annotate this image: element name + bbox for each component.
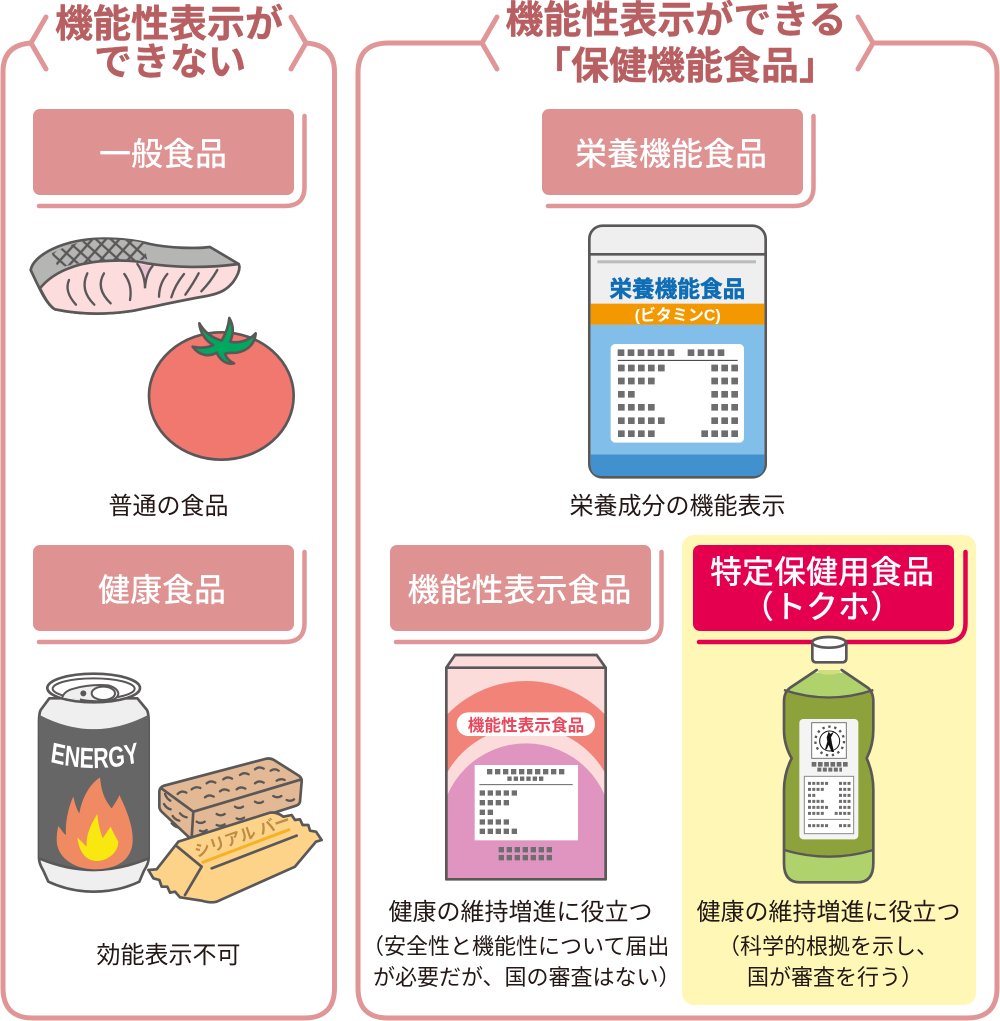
icon: cereal bar wrapper: シリアル バー [192,812,293,861]
icon: function claim food box: 機能性表示食品 [468,715,584,735]
label: tokuho: （トクホ） [742,589,902,625]
icon: vitamin supplement pouch [589,226,766,477]
caption: ordinary food: 普通の食品 [108,493,228,520]
heading: cannot display function: できない [94,42,246,84]
caption: no efficacy claims: 効能表示不可 [96,942,240,969]
text: notification note: が必要だが、国の審査はない） [373,965,681,990]
label: foods with function claims [390,545,662,642]
icon: energy drink can [38,672,150,893]
icon: function claim food box [445,654,607,881]
panel: can display function [358,17,997,1018]
icon: tokuho bottle [780,637,880,887]
icon: cereal block [159,759,302,839]
label: general food [33,109,304,206]
caption: nutrient function: 栄養成分の機能表示 [570,493,786,520]
heading: can display function: 機能性表示ができる [505,0,847,42]
icon: vitamin supplement pouch: 栄養機能食品 [609,276,745,302]
text: scientific evidence note: （科学的根拠を示し、 [718,934,938,959]
panel: cannot display function [3,17,334,1018]
icon: salmon [31,239,239,314]
label: health food [33,545,304,642]
caption: health maintenance left: 健康の維持増進に役立つ [388,899,652,926]
heading: cannot display function: 機能性表示が [55,4,283,46]
caption: health maintenance right: 健康の維持増進に役立つ [696,899,960,926]
label: general food: 一般食品 [99,136,227,172]
label: nutrient function food [542,109,814,206]
label: nutrient function food: 栄養機能食品 [575,136,767,172]
text: scientific evidence note: 国が審査を行う） [747,965,923,990]
icon: vitamin supplement pouch: (ビタミンC) [635,305,721,324]
icon: tomato [149,318,294,460]
icon: cereal bar wrapper [148,812,322,902]
icon: energy drink can: ENERGY [51,742,137,768]
text: notification note: （安全性と機能性について届出 [362,934,669,959]
label: tokuho: 特定保健用食品 [710,554,934,590]
label: tokuho [693,545,966,642]
label: foods with function claims: 機能性表示食品 [407,572,632,608]
panel: yellow highlight for tokuho [682,535,976,1005]
label: health food: 健康食品 [98,572,226,608]
heading: can display function: 「保健機能食品」 [533,46,837,88]
